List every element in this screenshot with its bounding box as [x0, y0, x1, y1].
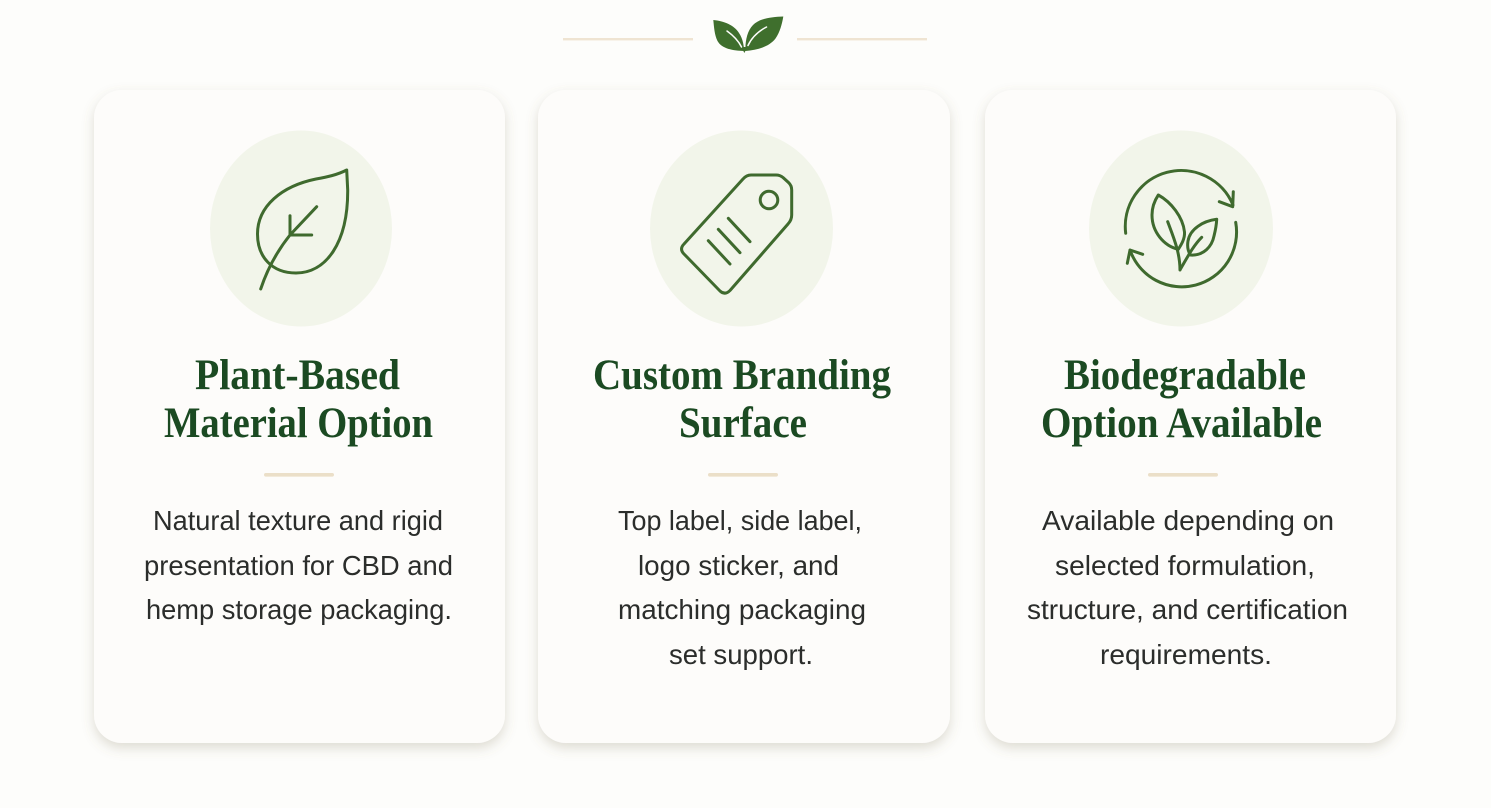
description: Available depending on [1042, 505, 1334, 536]
description: requirements. [1100, 639, 1272, 670]
heading [593, 352, 891, 447]
heading: Biodegradable [1064, 352, 1306, 399]
divider [708, 473, 778, 477]
heading [164, 352, 433, 447]
panel: custom branding [538, 90, 950, 743]
divider [264, 473, 334, 477]
description: Top label, side label, [618, 505, 862, 536]
description [1027, 505, 1348, 670]
icon: price tag [650, 130, 833, 326]
heading [1041, 352, 1322, 447]
description: presentation for CBD and [144, 550, 453, 581]
heading: Option Available [1041, 400, 1322, 447]
divider [1148, 473, 1218, 477]
description: matching packaging [618, 594, 866, 625]
icon: recycling leaves [1089, 130, 1273, 326]
icon: twin green leaves [713, 16, 783, 53]
description: hemp storage packaging. [146, 594, 452, 625]
description: set support. [669, 639, 813, 670]
description: logo sticker, and [638, 550, 839, 581]
description: Natural texture and rigid [153, 505, 443, 536]
icon: leaf [210, 130, 392, 326]
description: selected formulation, [1055, 550, 1315, 581]
panel: biodegradable [985, 90, 1396, 743]
heading: Surface [679, 400, 807, 447]
heading: Custom Branding [593, 352, 891, 399]
description: structure, and certification [1027, 594, 1348, 625]
description [618, 505, 866, 670]
description [144, 505, 453, 625]
panel: plant-based material [94, 90, 505, 743]
heading: Plant-Based [195, 352, 400, 399]
heading: Material Option [164, 400, 433, 447]
top ornament: divider lines and leaves [563, 16, 927, 53]
